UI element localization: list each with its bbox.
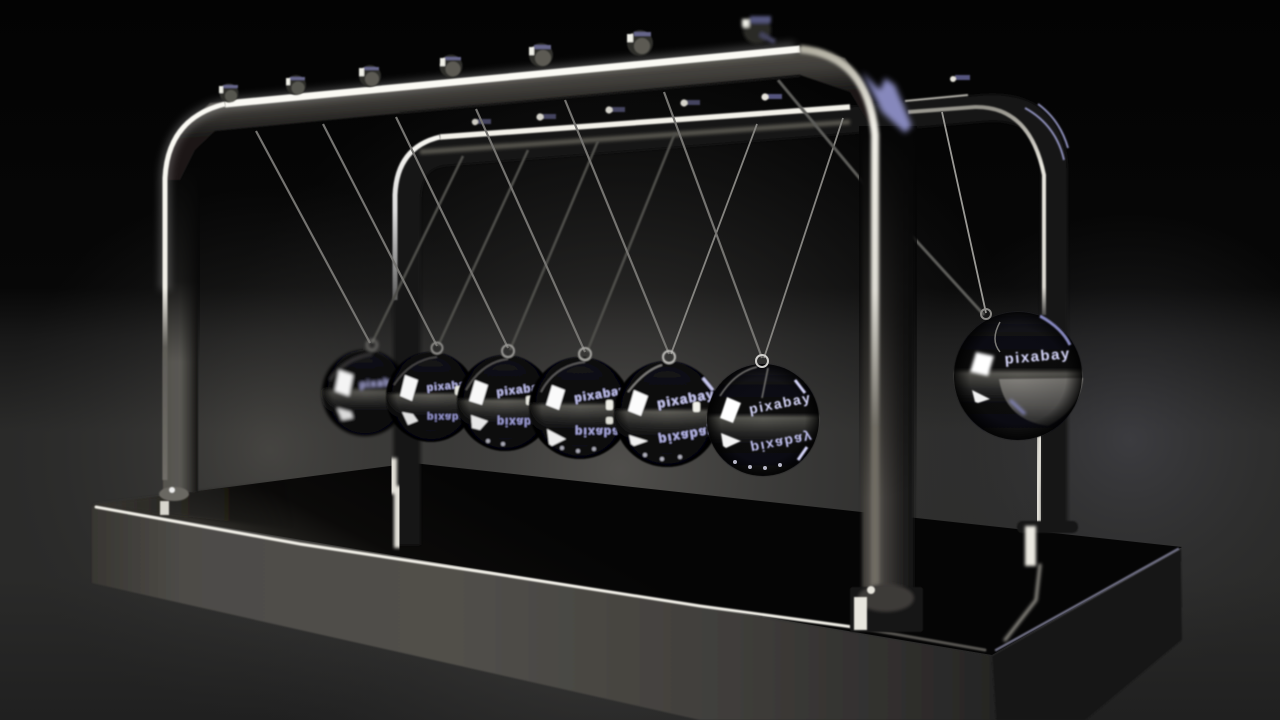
ball 7 swung out bbox=[954, 309, 1083, 440]
reflection of the horizon bbox=[999, 378, 1083, 426]
screw 5 bbox=[529, 43, 553, 67]
ball 5: pixabay bbox=[657, 423, 717, 448]
ball 7 swung out: pixabay bbox=[1004, 345, 1071, 368]
screw 3 bbox=[359, 65, 381, 87]
front frame glow bbox=[165, 47, 795, 290]
front frame left leg bbox=[163, 170, 198, 492]
blue reflection on the front bend bbox=[862, 72, 912, 133]
back frame lower band bbox=[420, 122, 850, 152]
screw 6 bbox=[627, 30, 653, 56]
bar underside line bbox=[400, 76, 800, 113]
back strings bbox=[372, 133, 675, 352]
base side face bbox=[992, 549, 1182, 720]
blue reflection on the back bend bbox=[1025, 104, 1068, 160]
screw 1 bbox=[219, 84, 238, 102]
screw 7 bbox=[742, 16, 775, 44]
front frame right leg bbox=[862, 130, 914, 592]
back frame lower left leg bbox=[393, 458, 398, 548]
back leg foot bbox=[1017, 521, 1078, 566]
back frame bbox=[393, 95, 1068, 548]
ball 1: pixabay bbox=[359, 376, 404, 391]
ball 3: pixabay bbox=[496, 381, 547, 399]
ball 1 bbox=[322, 340, 408, 436]
ball 6 bbox=[707, 355, 819, 476]
back frame screws bbox=[472, 75, 970, 125]
front frame top highlight bbox=[225, 49, 800, 104]
front right foot bbox=[850, 584, 923, 632]
base of the cradle bbox=[92, 463, 1182, 720]
ball 2 bbox=[386, 342, 476, 442]
ball 4 bbox=[529, 348, 631, 459]
balls bbox=[322, 309, 1083, 476]
ball 3: pixabay bbox=[497, 415, 547, 427]
strings bbox=[256, 80, 986, 358]
ball 4: pixabay bbox=[573, 383, 628, 405]
ball 6: pixabay bbox=[749, 429, 815, 457]
front frame screws bbox=[219, 16, 775, 102]
swung ball strings bbox=[778, 80, 984, 315]
front frame left highlight bbox=[165, 104, 225, 480]
ball 6: pixabay bbox=[748, 389, 813, 417]
screw 2 bbox=[286, 75, 306, 95]
screw 4 bbox=[440, 54, 462, 78]
back frame lower right leg bbox=[1044, 435, 1068, 525]
base edge highlights bbox=[96, 507, 1178, 650]
front frame bar bbox=[165, 47, 873, 180]
ball 5 bbox=[614, 351, 720, 467]
back frame tube bbox=[407, 108, 1054, 545]
front left foot bbox=[159, 487, 189, 515]
base top surface bbox=[92, 463, 1182, 655]
ball 2: pixabay bbox=[426, 378, 473, 394]
front frame right highlight bbox=[800, 49, 875, 590]
back frame highlight bbox=[395, 137, 440, 300]
ball 3 bbox=[457, 345, 553, 451]
front frame bbox=[161, 47, 917, 592]
ball 5: pixabay bbox=[656, 386, 716, 411]
front strings bbox=[256, 92, 762, 358]
ball 4: pixabay bbox=[575, 425, 628, 439]
ball 2: pixabay bbox=[427, 411, 473, 423]
chain reflection bbox=[733, 460, 782, 470]
base front face bbox=[92, 506, 996, 720]
